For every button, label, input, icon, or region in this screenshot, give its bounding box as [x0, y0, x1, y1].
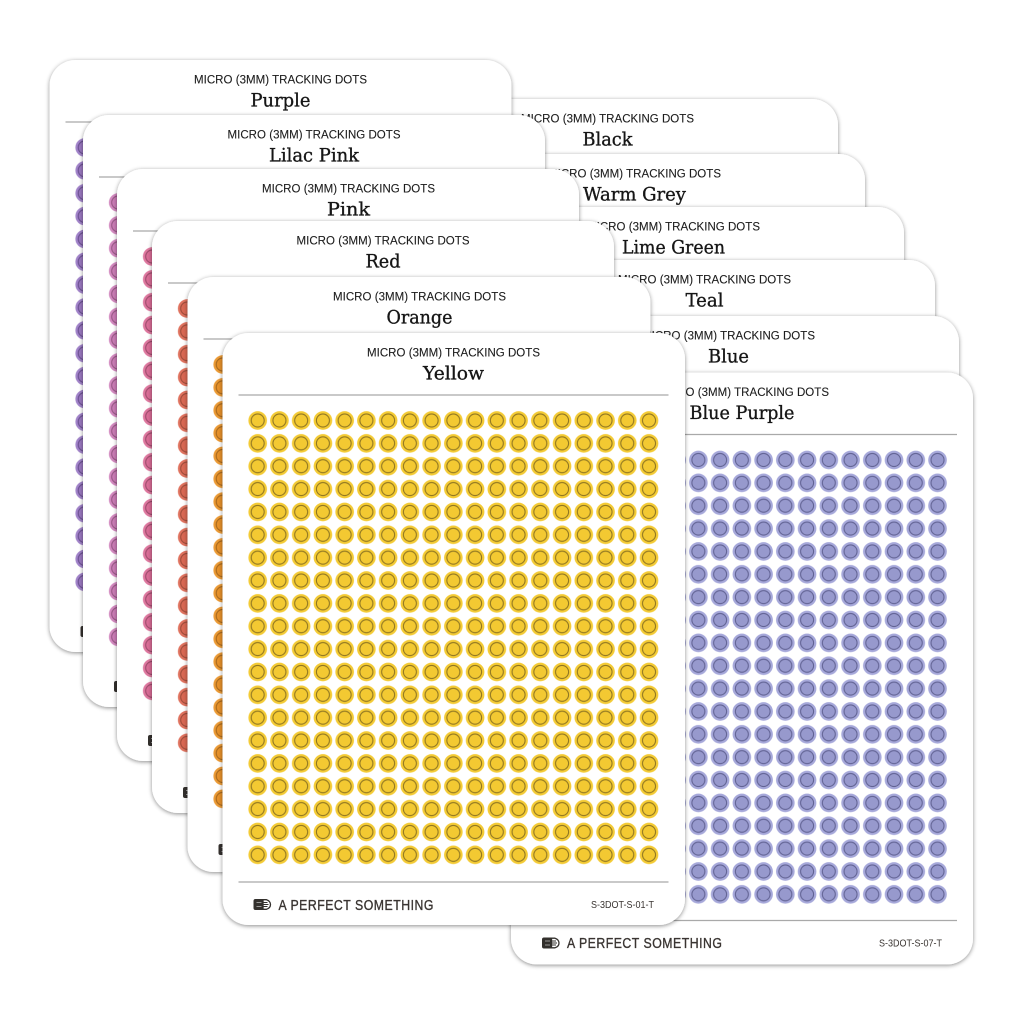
title: Lilac Pink: Lilac Pink	[269, 144, 359, 166]
label: Blue sheet heading: MICRO (3MM) TRACKING DOTS	[642, 330, 815, 342]
title: Blue Purple: Blue Purple	[690, 402, 794, 424]
dot grid: Lime Green	[466, 283, 879, 740]
title: Yellow: Yellow	[422, 362, 485, 384]
dot grid: Blue	[521, 392, 934, 849]
card: Red	[152, 221, 614, 813]
label: Blue Purple sheet heading: MICRO (3MM) TRACKING DOTS	[656, 387, 829, 399]
dot grid: Orange	[212, 353, 625, 810]
dot grid: Yellow	[247, 409, 660, 866]
card: Blue	[497, 316, 959, 908]
title: Lime Green: Lime Green	[622, 236, 725, 258]
icon: brand logo	[218, 844, 236, 855]
brand name: A PERFECT SOMETHING	[278, 897, 433, 913]
label: Warm Grey sheet heading: MICRO (3MM) TRACKING DOTS	[548, 168, 721, 180]
card: Lime Green	[442, 207, 904, 799]
card: Orange	[188, 277, 650, 872]
dot grid: Blue Purple	[535, 448, 948, 905]
title: Red: Red	[366, 250, 400, 272]
label: Teal sheet heading: MICRO (3MM) TRACKING DOTS	[618, 274, 791, 286]
title: Teal: Teal	[686, 290, 724, 312]
card: Teal	[473, 260, 935, 852]
label: Orange sheet heading: MICRO (3MM) TRACKING DOTS	[333, 292, 506, 304]
label: Black sheet heading: MICRO (3MM) TRACKING DOTS	[521, 114, 694, 126]
dot grid: Purple	[74, 136, 487, 593]
label: Lime Green sheet heading: MICRO (3MM) TRACKING DOTS	[587, 222, 760, 234]
dot grid: Black	[400, 175, 813, 632]
card: Pink	[117, 169, 579, 761]
title: Purple: Purple	[250, 90, 310, 112]
dot grid: Pink	[141, 245, 554, 702]
icon: brand logo	[80, 626, 98, 637]
icon: brand logo	[542, 938, 559, 948]
product code: S-3DOT-S-01-T	[591, 900, 654, 911]
icon: brand logo	[254, 899, 270, 910]
title: Warm Grey: Warm Grey	[583, 184, 686, 206]
title: Pink: Pink	[327, 198, 370, 220]
title: Black: Black	[582, 128, 633, 150]
label: Lilac Pink sheet heading: MICRO (3MM) TRACKING DOTS	[228, 130, 401, 142]
title: Orange: Orange	[386, 306, 452, 328]
dot grid: Warm Grey	[427, 230, 840, 687]
card: Black	[376, 99, 838, 691]
dot grid: Red	[176, 297, 589, 754]
brand name: A PERFECT SOMETHING	[567, 935, 722, 951]
title: Blue: Blue	[708, 346, 749, 368]
card: Lilac Pink	[83, 115, 545, 707]
label: Yellow sheet heading: MICRO (3MM) TRACKING DOTS	[367, 348, 540, 360]
label: Red sheet heading: MICRO (3MM) TRACKING DOTS	[296, 236, 470, 248]
card: Warm Grey	[403, 154, 865, 746]
card: Blue Purple	[511, 372, 973, 964]
label: Purple sheet heading: MICRO (3MM) TRACKING DOTS	[194, 74, 367, 86]
card: Yellow	[222, 333, 685, 925]
icon: brand logo	[183, 787, 200, 798]
product code: S-3DOT-S-07-T	[879, 938, 942, 950]
dot grid: Teal	[497, 336, 910, 793]
label: Pink sheet heading: MICRO (3MM) TRACKING DOTS	[262, 184, 435, 196]
dot grid: Lilac Pink	[107, 191, 520, 648]
icon: brand logo	[148, 735, 165, 746]
icon: brand logo	[114, 681, 131, 692]
card: Purple	[50, 60, 512, 652]
